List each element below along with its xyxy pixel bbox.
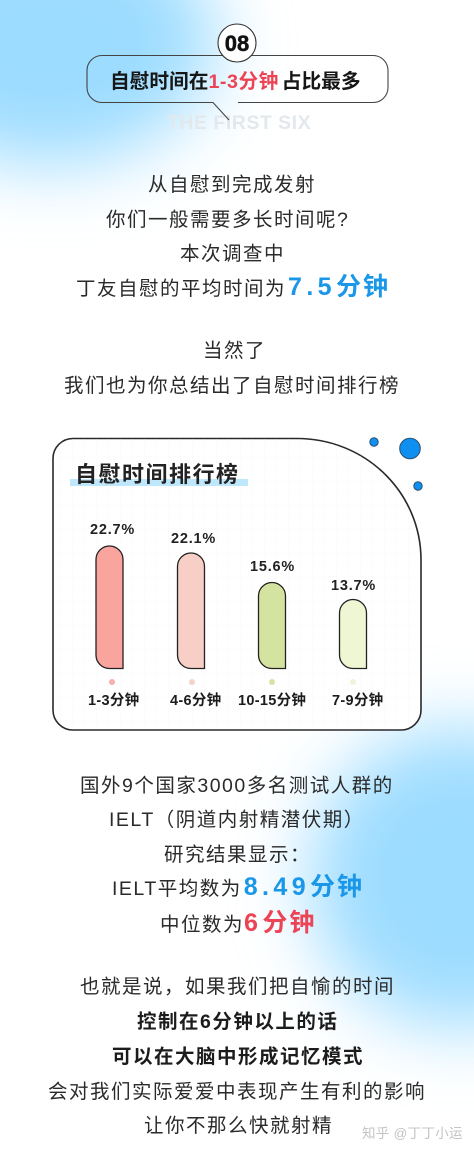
bar: 4-6分钟 22.1%: 4-6分钟	[170, 692, 221, 709]
text block: IELT research: IELT平均数为8.49分钟	[112, 873, 364, 901]
bar: 7-9分钟 13.7%	[331, 578, 383, 709]
card outline	[53, 438, 421, 730]
text block: IELT research: IELT（阴道内射精潜伏期）	[109, 809, 365, 831]
bar: 1-3分钟 22.7%: 1-3分钟	[88, 692, 139, 709]
header: number badge and speech bubble	[86, 24, 389, 134]
text block: conclusion	[48, 976, 426, 1137]
text block: intro: 当然了	[203, 340, 266, 362]
text block: intro: 本次调查中	[180, 243, 285, 265]
watermark: 知乎 @丁丁小运	[362, 1126, 463, 1141]
text block: intro: 你们一般需要多长时间呢?	[106, 209, 349, 231]
bar chart	[88, 522, 383, 709]
bar: 7-9分钟 13.7%: 13.7%	[331, 578, 376, 594]
speech bubble outline	[87, 56, 388, 120]
text block: IELT research: 中位数为6分钟	[160, 909, 316, 937]
text block: conclusion: 也就是说，如果我们把自愉的时间	[80, 976, 395, 998]
text block: conclusion: 让你不那么快就射精	[144, 1115, 333, 1137]
bar: 4-6分钟 22.1%: 22.1%	[171, 531, 216, 547]
bar: 10-15分钟 15.6%: 10-15分钟	[238, 692, 306, 709]
text block: conclusion: 可以在大脑中形成记忆模式	[112, 1046, 364, 1068]
bar: 7-9分钟 13.7%: 7-9分钟	[332, 692, 383, 709]
bar: 10-15分钟 15.6%: 15.6%	[250, 559, 295, 575]
number badge	[218, 24, 256, 62]
text block: conclusion: 会对我们实际爱爱中表现产生有利的影响	[48, 1081, 426, 1103]
chart title: 自慰时间排行榜	[75, 462, 240, 487]
header title: 自慰时间在1-3分钟占比最多	[110, 71, 361, 93]
text block: intro: 从自慰到完成发射	[148, 174, 316, 196]
icon: decorative dots	[370, 438, 422, 490]
bar: 10-15分钟 15.6%	[238, 559, 306, 709]
bar: 4-6分钟 22.1%	[170, 531, 221, 709]
text block: intro: 丁友自慰的平均时间为7.5分钟	[76, 273, 390, 301]
text block: IELT research: 研究结果显示：	[164, 844, 311, 866]
text block: IELT research: 国外9个国家3000多名测试人群的	[80, 775, 394, 797]
bar: 1-3分钟 22.7%	[88, 522, 139, 709]
text block: IELT research	[80, 775, 394, 937]
text block: intro: 我们也为你总结出了自慰时间排行榜	[64, 375, 400, 397]
number badge: 08	[225, 31, 249, 56]
text block: intro	[64, 174, 400, 397]
panel: ranking chart card	[52, 437, 423, 731]
bar: 1-3分钟 22.7%: 22.7%	[90, 522, 135, 538]
text block: conclusion: 控制在6分钟以上的话	[137, 1011, 338, 1033]
subtitle ghost text: THE FIRST SIX	[167, 112, 311, 134]
